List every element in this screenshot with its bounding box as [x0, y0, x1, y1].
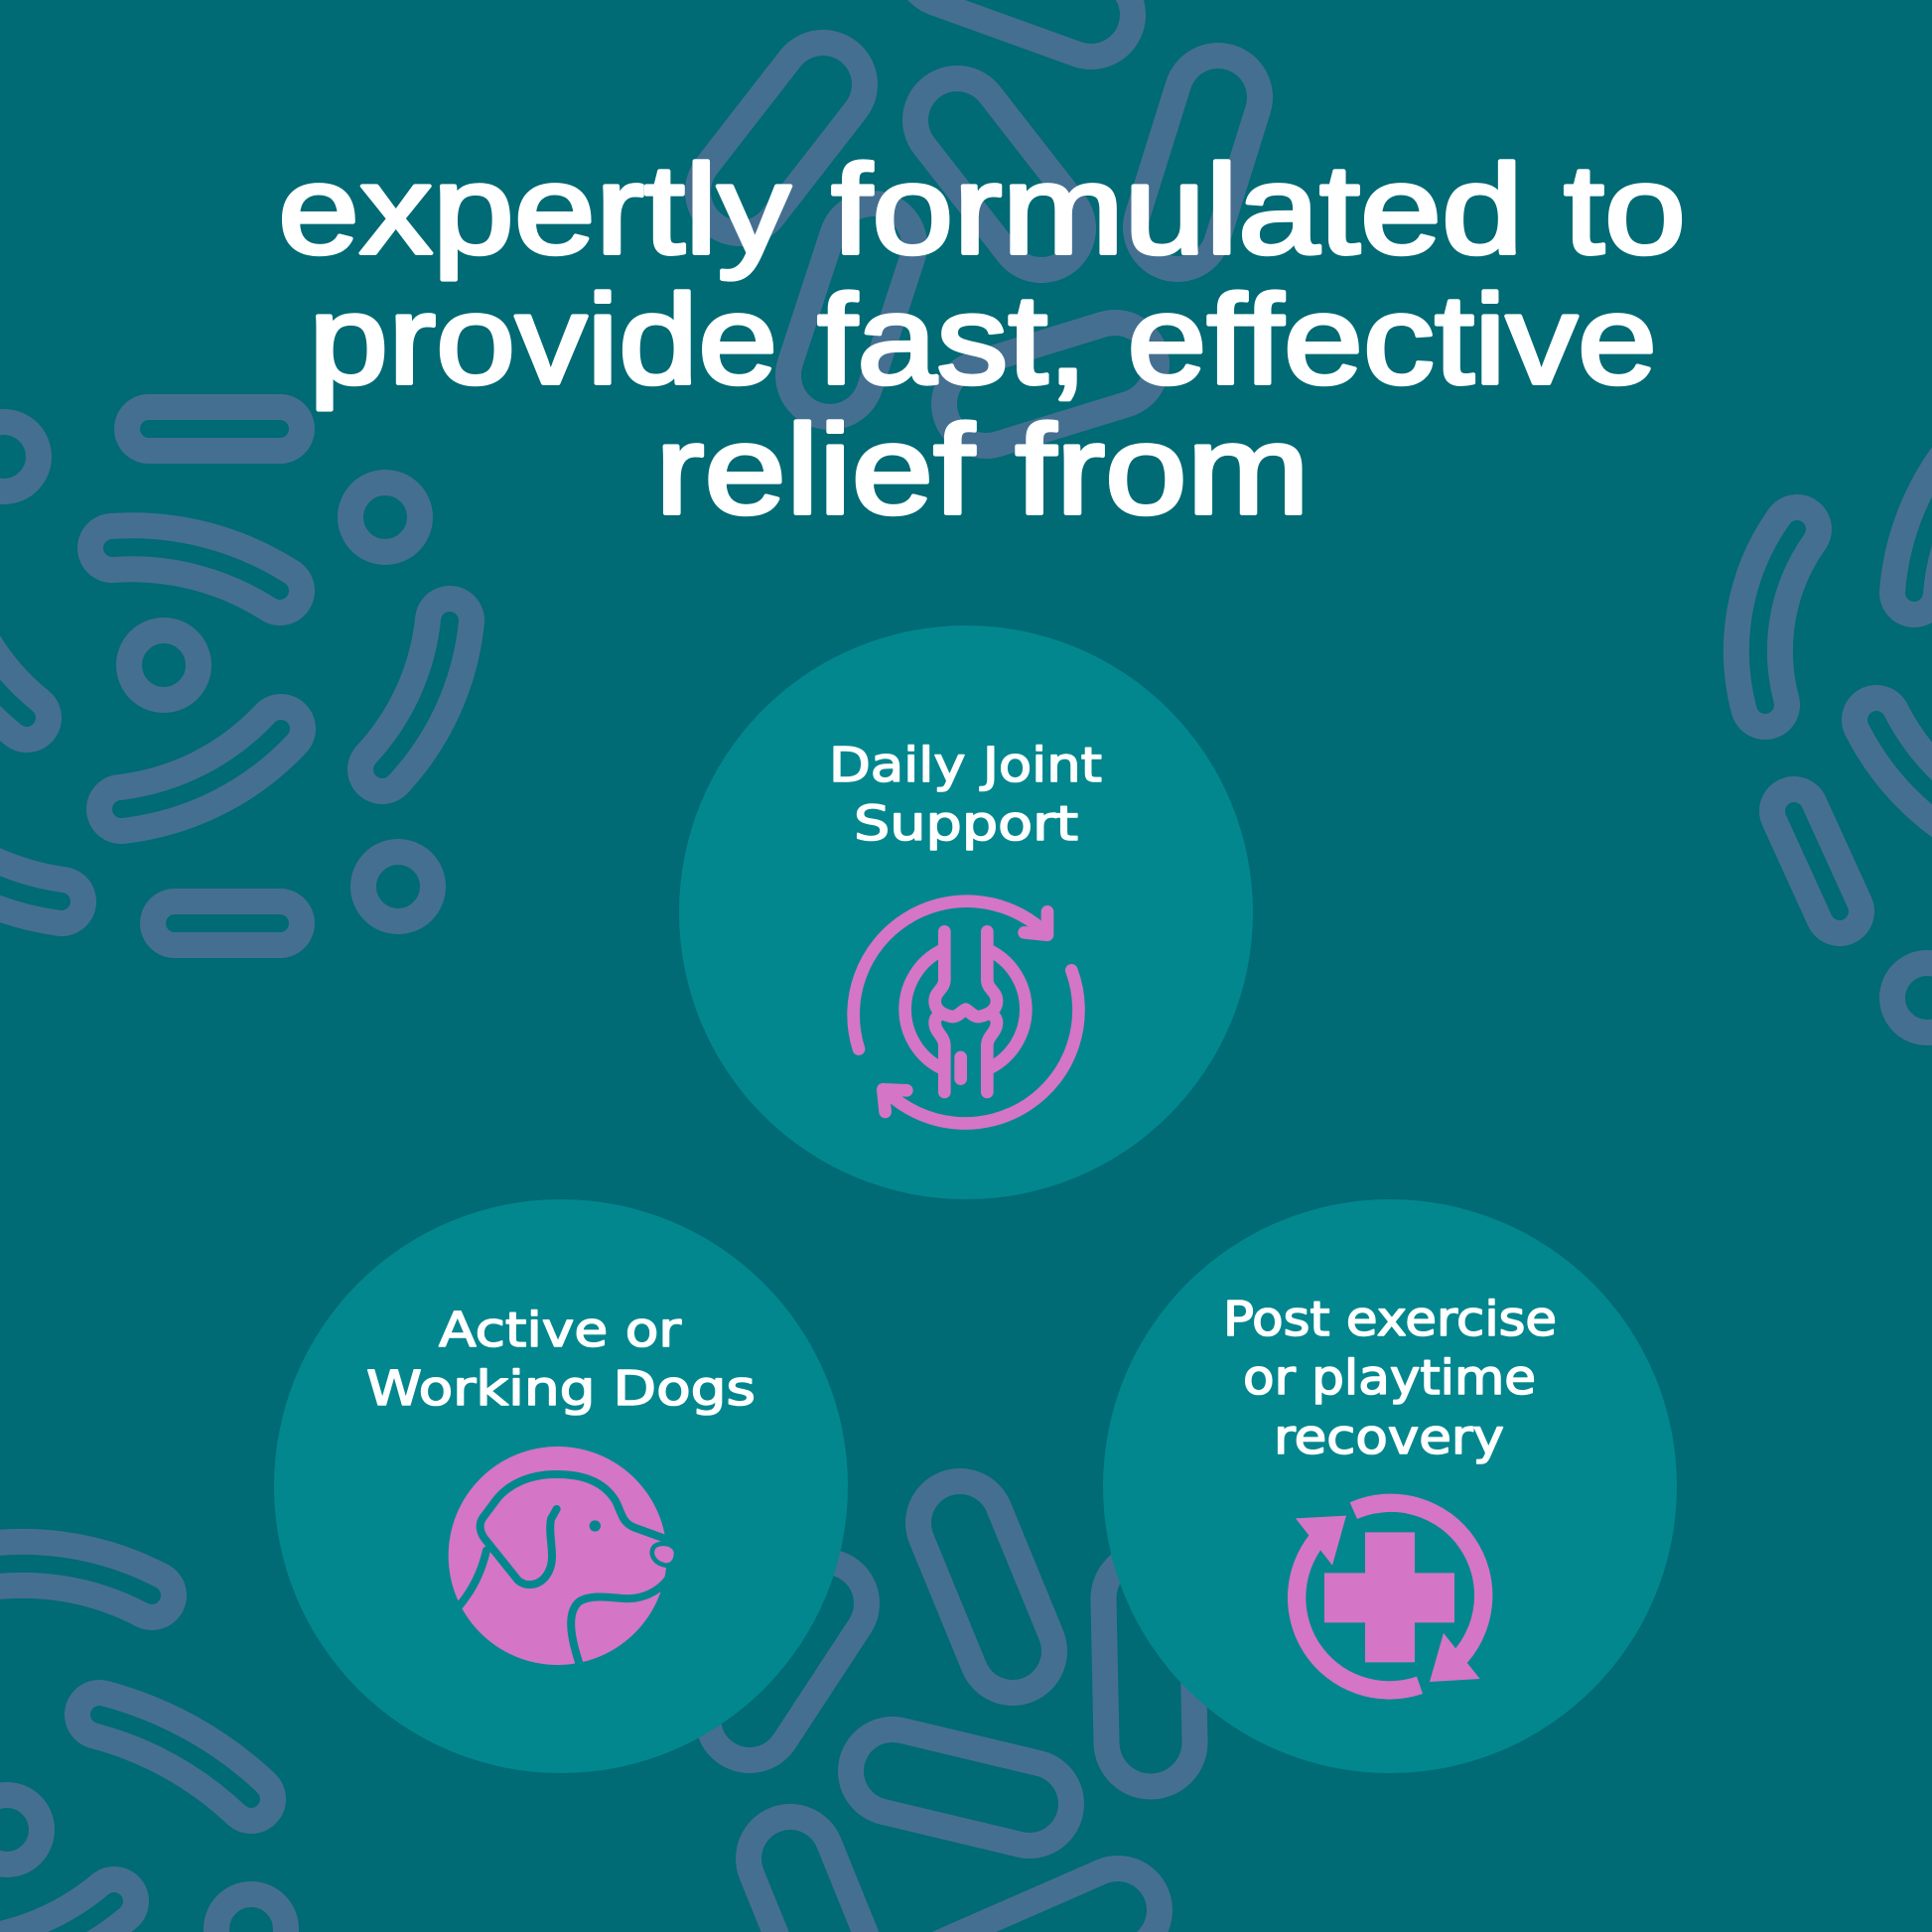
label: post exercise or playtime recovery: Post exercise: [1223, 1292, 1557, 1347]
label: active or working dogs: Working Dogs: [366, 1361, 756, 1417]
panel: post exercise or playtime recovery: [1103, 1199, 1677, 1773]
title: provide fast, effective: [309, 269, 1657, 411]
label: daily joint support: Support: [854, 796, 1078, 852]
label: daily joint support: [829, 738, 1102, 852]
panel background circle: [679, 625, 1253, 1199]
title: expertly formulated to: [278, 139, 1686, 281]
panel background circle: [274, 1199, 848, 1773]
title: relief from: [655, 399, 1310, 541]
label: active or working dogs: Active or: [439, 1303, 681, 1358]
icon: dog head in circle: [449, 1447, 676, 1665]
label: post exercise or playtime recovery: recovery: [1274, 1410, 1504, 1465]
icon: medical cross with circular arrows: [1296, 1503, 1483, 1690]
label: active or working dogs: [366, 1303, 756, 1417]
panel: daily joint support: [679, 625, 1253, 1199]
panel: active or working dogs: [274, 1199, 848, 1773]
title: [278, 139, 1686, 541]
icon detail: dog nose: [652, 1544, 676, 1566]
label: post exercise or playtime recovery: [1223, 1292, 1557, 1465]
icon: knee joint with circular arrows: [854, 901, 1078, 1124]
label: post exercise or playtime recovery: or playtime: [1243, 1350, 1536, 1406]
panel background circle: [1103, 1199, 1677, 1773]
label: daily joint support: Daily Joint: [829, 738, 1102, 793]
